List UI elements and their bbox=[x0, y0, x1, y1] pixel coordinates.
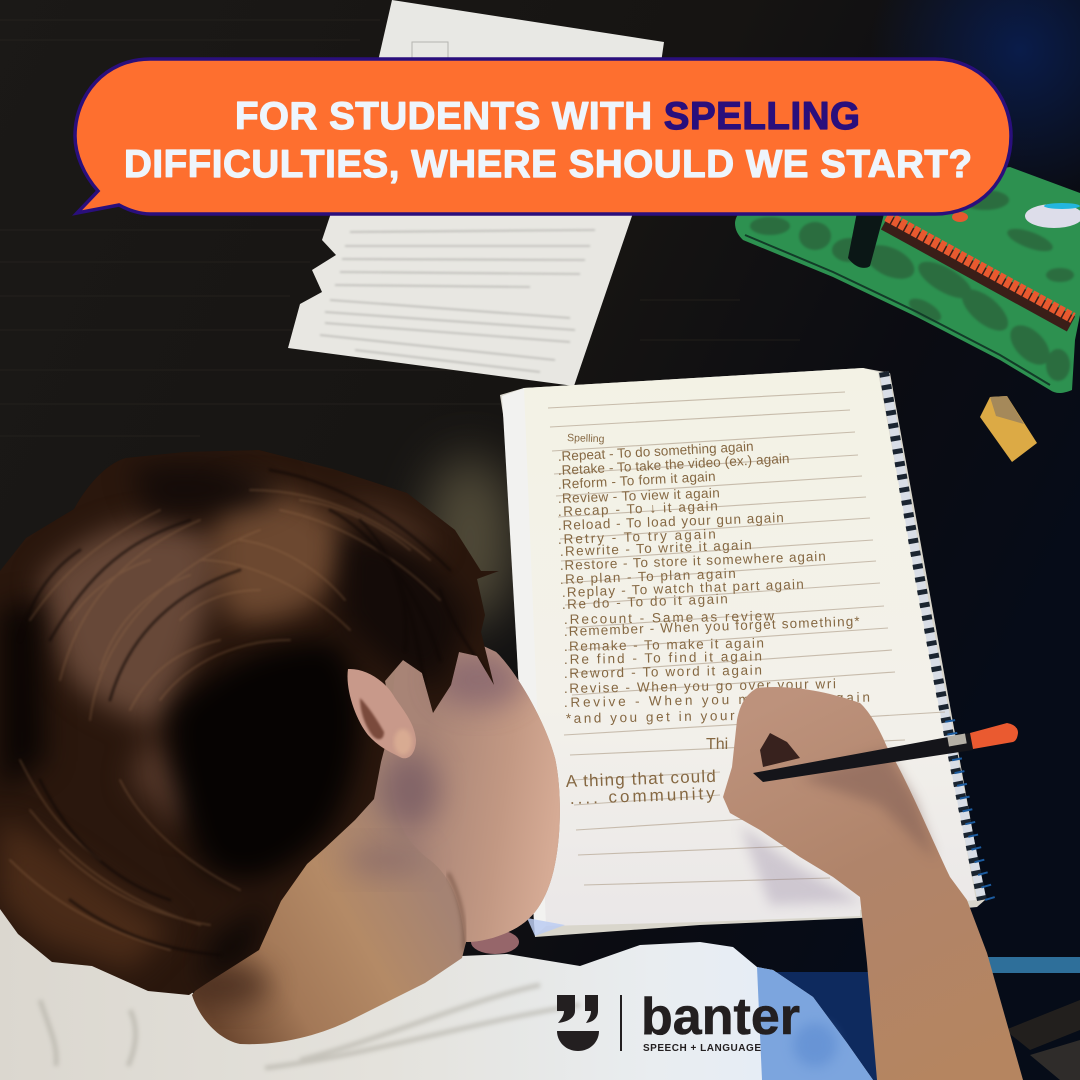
handwritten spelling list: Spelling bbox=[567, 432, 605, 445]
handwritten spelling list: .Revise - When you go over your wri bbox=[564, 676, 836, 696]
photo: black pencil with red eraser bbox=[753, 723, 1018, 782]
logo icon: smiling quote marks bbox=[557, 995, 599, 1051]
heading: DIFFICULTIES, WHERE SHOULD WE START? bbox=[124, 143, 972, 186]
handwritten spelling list: .Replay - To watch that part again bbox=[562, 577, 804, 600]
photo: dark blue floor under shirt and arm bbox=[770, 972, 880, 1080]
pouch camouflage pattern bbox=[750, 190, 1074, 381]
logo: banter speech + language: SPEECH + LANGUAGE bbox=[643, 1043, 761, 1054]
hair shadow areas bbox=[0, 462, 470, 985]
handwritten spelling list: .Re plan - To plan again bbox=[560, 566, 736, 587]
photo: blue shelf edge at right bbox=[987, 957, 1080, 1080]
handwritten spelling list: .Revive - When you make a... again bbox=[564, 690, 870, 710]
logo: banter speech + language: banter bbox=[641, 988, 800, 1046]
handwritten spelling list: .Recap - To ↓ it again bbox=[558, 498, 718, 519]
photo: boy's ear bbox=[348, 669, 416, 758]
handwritten spelling list: .... community bbox=[569, 784, 716, 808]
handwritten spelling list: .Reform - To form it again bbox=[557, 469, 716, 492]
hair lit areas bbox=[0, 487, 440, 970]
handwritten spelling list: .Recount - Same as review bbox=[564, 608, 774, 627]
handwritten spelling list: .Repeat - To do something again bbox=[557, 439, 754, 464]
handwritten spelling list: .Remake - To make it again bbox=[564, 636, 764, 654]
photo: eraser bbox=[980, 396, 1037, 462]
handwritten spelling list: .Reword - To word it again bbox=[564, 663, 762, 681]
photo: handwritten loose sheet bbox=[288, 210, 634, 386]
handwritten spelling list: .Rewrite - To write it again bbox=[560, 537, 752, 559]
handwritten spelling list: .Reload - To load your gun again bbox=[558, 510, 784, 533]
handwritten spelling list: .Remember - When you forget something* bbox=[564, 614, 861, 639]
handwritten spelling list: .Re find - To find it again bbox=[564, 649, 762, 667]
photo: boy's lip and chin bbox=[471, 930, 519, 954]
notebook spiral binding bbox=[884, 372, 991, 902]
handwritten spelling list: .Re do - To do it again bbox=[562, 591, 728, 612]
photo: boy's white shirt bbox=[0, 905, 873, 1080]
heading: FOR STUDENTS WITH SPELLING bbox=[235, 95, 860, 138]
handwritten spelling list bbox=[557, 432, 870, 808]
handwritten spelling list: *and you get in your h bbox=[566, 708, 751, 726]
photo: boy's neck and cheek bbox=[192, 646, 560, 1044]
handwritten spelling list: .Retry - To try again bbox=[558, 526, 716, 547]
logo: banter speech + language bbox=[557, 988, 800, 1054]
hair strands bbox=[10, 470, 485, 955]
shadow of hand on page bbox=[740, 825, 862, 905]
photo: writing arm and hand bbox=[723, 687, 1023, 1080]
photo: boy's dark brown hair bbox=[0, 440, 510, 1000]
heading bbox=[124, 95, 972, 186]
photo: open spiral notebook bbox=[500, 368, 991, 937]
handwritten spelling list: .Restore - To store it somewhere again bbox=[560, 549, 826, 573]
handwritten spelling list: .Retake - To take the video (ex.) again bbox=[557, 451, 790, 478]
handwritten spelling list: .Review - To view it again bbox=[558, 485, 720, 506]
handwritten spelling list: A thing that could bbox=[565, 767, 716, 791]
photo: green pencil pouch bbox=[735, 167, 1080, 393]
handwritten spelling list: Thi bbox=[706, 736, 728, 753]
photo: loose paper at top bbox=[376, 0, 664, 70]
speech bubble bbox=[75, 59, 1011, 214]
